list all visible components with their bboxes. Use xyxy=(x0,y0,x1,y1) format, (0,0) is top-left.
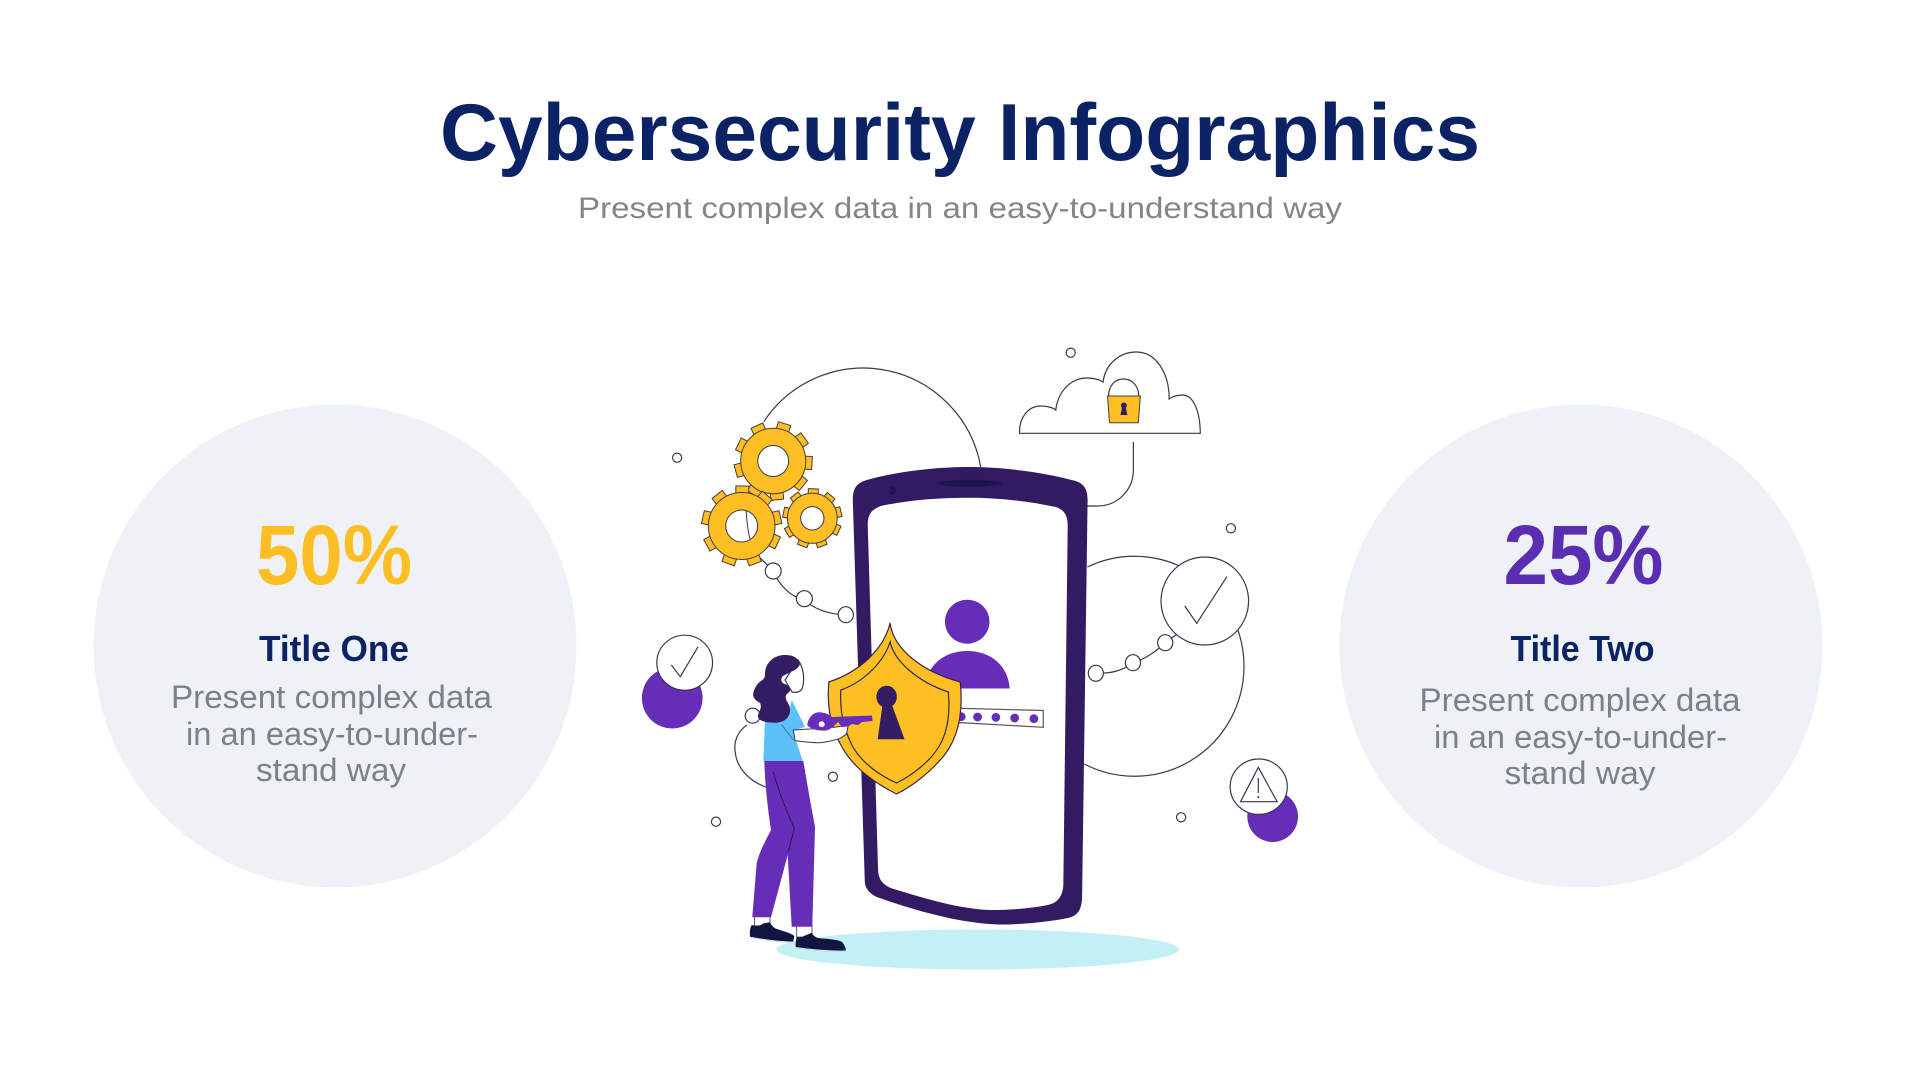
panel: right stat xyxy=(1340,404,1822,888)
trousers xyxy=(752,761,815,927)
phone body xyxy=(853,467,1088,925)
description text xyxy=(1420,682,1741,791)
title: Cybersecurity Infographics xyxy=(440,88,1480,178)
arm xyxy=(793,725,848,743)
arc right of phone xyxy=(1084,556,1244,776)
left gear xyxy=(701,486,782,566)
hair xyxy=(753,655,800,723)
description text: in an easy-to-under- xyxy=(1434,719,1727,755)
shield with keyhole xyxy=(828,623,961,794)
heading: title one: Title One xyxy=(259,628,409,669)
ground shadow xyxy=(776,930,1179,970)
left shoe xyxy=(750,922,794,942)
description text: Present complex data xyxy=(1420,682,1741,718)
stat value 25%: 25% xyxy=(1504,508,1664,602)
panel: left stat xyxy=(94,404,576,888)
description text: Present complex data xyxy=(171,679,492,715)
key xyxy=(807,712,872,731)
subtitle: Present complex data in an easy-to-understand way xyxy=(578,192,1342,225)
icon: left check badge xyxy=(642,635,713,728)
scene objects xyxy=(642,348,1298,970)
right bead chain xyxy=(1088,634,1177,681)
phone screen xyxy=(868,498,1068,910)
person holding key xyxy=(750,655,872,952)
description text: in an easy-to-under- xyxy=(186,716,478,752)
password field xyxy=(948,708,1043,727)
left bead chain xyxy=(760,558,853,623)
small floating dots xyxy=(673,348,1235,826)
icon: user avatar xyxy=(925,600,1010,688)
icon: warning badge xyxy=(1230,759,1298,842)
illustration: cybersecurity scene xyxy=(642,348,1298,970)
panel background circle xyxy=(1340,404,1822,888)
icon: cloud with padlock xyxy=(1020,352,1200,433)
description text xyxy=(171,679,492,788)
phone xyxy=(853,467,1088,925)
cloud connector line xyxy=(1073,442,1133,506)
stat value 50%: 50% xyxy=(256,508,412,602)
face xyxy=(785,660,804,692)
phone earpiece xyxy=(936,480,1002,487)
panel background circle xyxy=(94,404,576,888)
bead near person xyxy=(745,708,760,723)
description text: stand way xyxy=(256,752,406,788)
phone camera xyxy=(889,487,896,495)
right shoe xyxy=(796,933,846,952)
shirt xyxy=(763,700,805,761)
right gear xyxy=(783,489,842,548)
arc left of person xyxy=(735,725,767,787)
heading: title two: Title Two xyxy=(1510,628,1654,669)
top gear xyxy=(734,422,812,500)
arc above phone xyxy=(764,368,981,467)
icon: right check badge xyxy=(1161,557,1249,645)
ankles xyxy=(754,915,812,937)
icon: gears xyxy=(701,422,842,566)
description text: stand way xyxy=(1504,755,1656,791)
